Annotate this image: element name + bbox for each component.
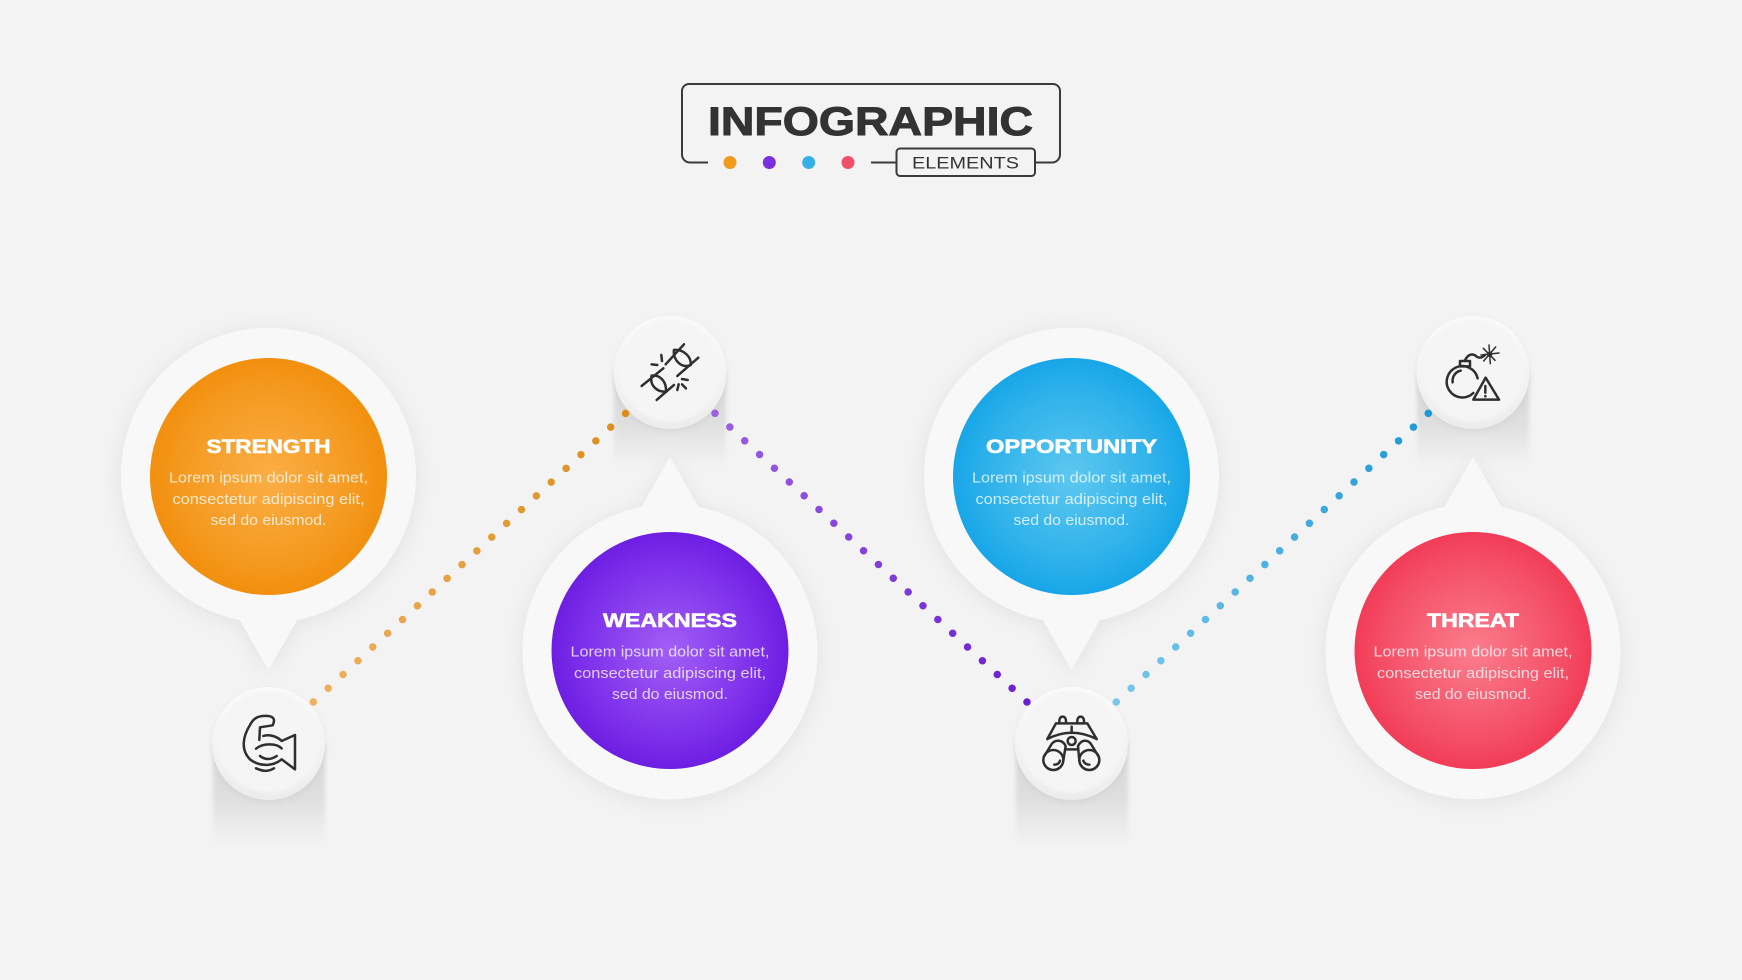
threat bubble (1326, 457, 1620, 799)
weakness body text (570, 644, 770, 703)
subtitle badge (896, 148, 1035, 176)
panel: threat (1326, 457, 1620, 799)
strength disc (150, 358, 387, 595)
threat body text: sed do eiusmod. (1415, 686, 1531, 703)
opportunity body text: sed do eiusmod. (1014, 512, 1130, 529)
strength body text (169, 470, 368, 529)
strength body text: Lorem ipsum dolor sit amet, (169, 470, 368, 486)
icon column shadows (213, 372, 1529, 845)
connector: opportunity to threat (1116, 413, 1428, 702)
opportunity body text: consectetur adipiscing elit, (976, 491, 1168, 508)
icon: binoculars (1043, 717, 1099, 770)
strength heading: STRENGTH (206, 436, 330, 458)
strength bubble (121, 328, 416, 670)
weakness body text: sed do eiusmod. (612, 686, 728, 703)
icon badge: muscle (212, 687, 325, 800)
strength body text: consectetur adipiscing elit, (172, 491, 364, 508)
weakness disc (552, 532, 788, 769)
icon badge: broken chain (614, 316, 726, 429)
panel: opportunity (924, 328, 1219, 670)
title text: INFOGRAPHIC (708, 100, 1033, 144)
weakness bubble (522, 457, 818, 799)
weakness body text: Lorem ipsum dolor sit amet, (570, 644, 770, 660)
icon: broken chain (642, 344, 698, 400)
connector: weakness to opportunity (715, 413, 1027, 702)
icon: flexed arm (244, 716, 295, 771)
weakness heading: WEAKNESS (603, 610, 737, 632)
opportunity disc (953, 358, 1190, 595)
title block (682, 84, 1060, 176)
opportunity body text (972, 470, 1171, 529)
icon badge: binoculars (1015, 687, 1128, 800)
connector: strength to weakness (313, 413, 626, 702)
opportunity bubble (924, 328, 1219, 670)
threat body text: consectetur adipiscing elit, (1377, 665, 1569, 682)
title frame (682, 84, 1060, 162)
subtitle badge: ELEMENTS (912, 153, 1019, 172)
panel: strength (121, 328, 416, 670)
threat body text: Lorem ipsum dolor sit amet, (1374, 644, 1572, 660)
strength body text: sed do eiusmod. (210, 512, 326, 529)
icon badge: bomb (1416, 316, 1530, 429)
threat heading: THREAT (1427, 610, 1519, 632)
panel: weakness (522, 457, 818, 799)
opportunity heading: OPPORTUNITY (986, 436, 1157, 458)
opportunity body text: Lorem ipsum dolor sit amet, (972, 470, 1171, 486)
title colour dots (724, 156, 854, 169)
threat body text (1374, 644, 1572, 703)
weakness body text: consectetur adipiscing elit, (574, 665, 766, 682)
threat disc (1354, 532, 1592, 769)
icon: bomb with warning (1447, 345, 1499, 400)
